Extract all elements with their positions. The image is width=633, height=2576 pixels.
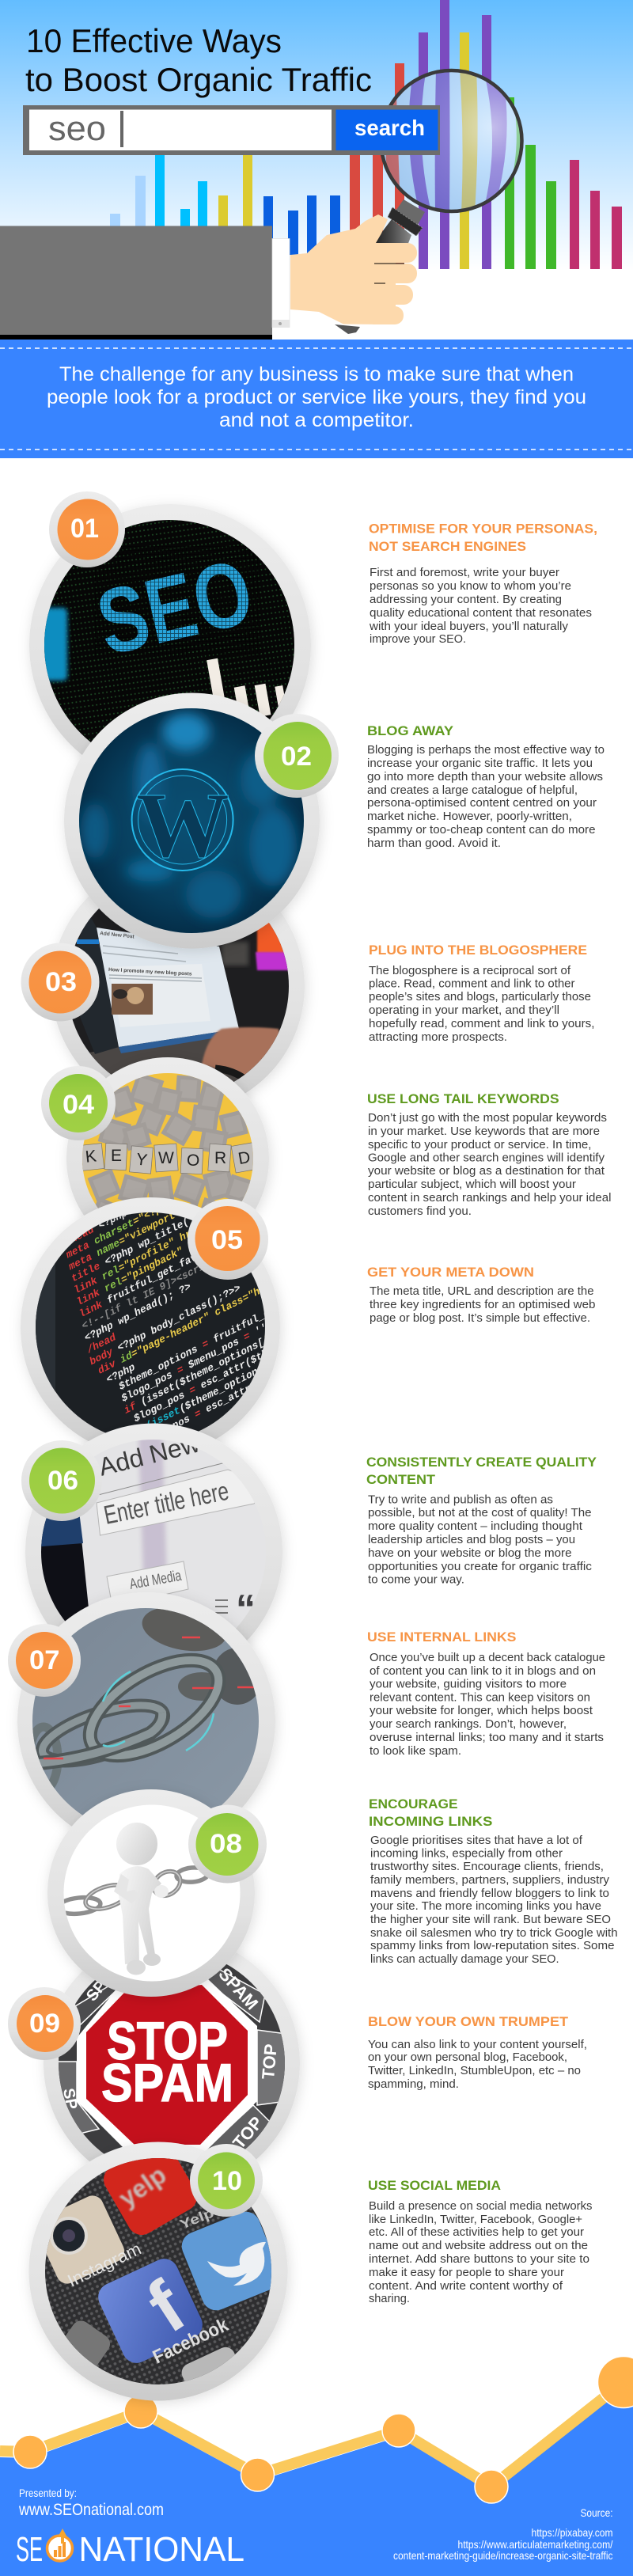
badge 07: 07 — [29, 1645, 60, 1675]
circle 04: keyword tiles: R — [214, 1149, 226, 1167]
circle 05: source code screen: head <?php bloginfo( 'charset' ); ?> — [70, 1134, 272, 1246]
circle 05: source code screen: /head — [86, 1331, 116, 1356]
circle 09: stop spam sign: STOP — [107, 2011, 228, 2071]
circle 05: source code screen: if lt IE 8 ]> <html class="no-js"> ]> — [83, 1085, 291, 1200]
circle 06: add new post screen: Add Media — [128, 1568, 183, 1593]
text block 03: place. Read, comment and link to other — [369, 978, 575, 991]
text block 04: in your market. Use keywords that are more — [368, 1125, 600, 1138]
text block 09 — [368, 2014, 587, 2091]
circle 06: add new post screen: “ — [236, 1587, 256, 1631]
text block 01: personas so you know to whom you’re — [370, 580, 571, 593]
circle 06: add new post screen — [21, 1423, 288, 1645]
text block 07: USE INTERNAL LINKS — [367, 1629, 516, 1645]
text block 03: PLUG INTO THE BLOGOSPHERE — [369, 943, 587, 958]
text block 04: Google and other search engines will identify — [368, 1152, 605, 1165]
text block 08: family members, partners, suppliers, industry — [370, 1874, 610, 1887]
badge 02 — [255, 714, 339, 798]
circle 04: keyword tiles: E — [111, 1147, 122, 1165]
text block 07: your website, guiding visitors to more — [370, 1678, 567, 1690]
title — [25, 22, 372, 98]
text block 03: people’s sites and blogs, particularly those — [369, 991, 591, 1003]
presented by — [18, 2487, 164, 2519]
circle 05: source code screen: html <?php language_attributes(); ?> — [71, 1121, 273, 1232]
source list: https://www.articulatemarketing.com/ — [457, 2538, 613, 2551]
badge 03: 03 — [45, 967, 77, 997]
text block 08: links can actually damage your SEO. — [370, 1953, 559, 1966]
text block 02: harm than good. Avoid it. — [367, 837, 501, 850]
text block 10: Build a presence on social media networks — [369, 2200, 592, 2213]
text block 08: Google prioritises sites that have a lot of — [370, 1834, 583, 1847]
text block 05: page or blog post. It’s simple but effective. — [370, 1312, 590, 1325]
circle 10: social media app icons: Yelp — [177, 2205, 216, 2233]
circle 07: steel chain links — [8, 1592, 275, 1850]
text block 03: hopefully read, comment and link to yours, — [369, 1018, 595, 1030]
text block 09: You can also link to your content yourself, — [368, 2039, 587, 2051]
badge 05 — [188, 1199, 268, 1280]
text block 04: particular subject, which will boost your — [368, 1178, 576, 1191]
circle 02: WordPress logo — [64, 693, 339, 948]
circle 05: source code screen: [if IE 8 ]> <html <?php language_attributes(); — [79, 1076, 337, 1215]
circle 05: source code screen: div id="page-header" class="hfeed site"> — [97, 1254, 322, 1377]
circle 05: source code screen: $logo_pos = $menu_pos = ''; — [121, 1318, 273, 1405]
badge 09 — [8, 1987, 81, 2060]
text block 01: First and foremost, write your buyer — [370, 567, 559, 579]
text block 04 — [367, 1091, 611, 1218]
text block 09: on your own personal blog, Facebook, — [368, 2051, 567, 2064]
circle 01: SEO screen — [29, 491, 311, 786]
circle 05: source code screen: body <?php body_class();?>> — [89, 1281, 241, 1368]
circle 05: source code screen: <?php — [105, 1360, 136, 1387]
text block 02: market niche. However, poorly-written, — [367, 810, 572, 823]
circle 09: stop spam sign: STOP — [222, 2113, 267, 2161]
text block 02: and creates a large catalogue of helpful, — [367, 784, 578, 797]
text block 07: relevant content. This can keep visitors on — [370, 1692, 590, 1705]
badge 05: 05 — [211, 1225, 243, 1255]
header illustration panel — [0, 0, 633, 340]
text block 03: The blogosphere is a reciprocal sort of — [369, 965, 571, 977]
text block 02: go into more depth than your website allows — [367, 771, 603, 783]
icon: magnifying glass — [335, 70, 524, 334]
text block 02 — [367, 723, 605, 850]
text block 06: CONTENT — [366, 1472, 436, 1487]
text block 06: leadership articles and blog posts – you — [368, 1534, 575, 1546]
bar chart — [110, 0, 622, 269]
circle 09: stop spam sign: SP — [83, 1978, 110, 2005]
text block 08 — [369, 1796, 618, 1966]
badge 08: 08 — [210, 1829, 242, 1859]
badge 10 — [190, 2144, 263, 2217]
text block 04: your website or blog as a destination for that — [368, 1165, 605, 1178]
circle 02: WordPress logo: W — [136, 773, 229, 877]
source list: https://pixabay.com — [532, 2526, 612, 2539]
text block 02: spammy or too-cheap content can do more — [367, 824, 595, 837]
badge 01 — [49, 491, 125, 567]
text block 08: your site. The more incoming links you have — [370, 1900, 601, 1913]
text block 06: to come your way. — [368, 1573, 464, 1586]
text block 07: Once you’ve built up a decent back catalogue — [370, 1652, 605, 1664]
text block 10: etc. All of these activities help to get your — [369, 2226, 584, 2239]
text block 07: your website for longer, which helps boost — [370, 1705, 593, 1717]
footer panel: rising line chart — [0, 2357, 633, 2576]
circle 05: source code screen: <?php wp_head(); ?> — [84, 1280, 191, 1345]
circle 04: keyword tiles: O — [187, 1151, 199, 1170]
badge 01: 01 — [70, 514, 99, 544]
text block 01: quality educational content that resonates — [370, 607, 592, 620]
circle 05: source code screen: link rel="pingback" href="<?php bloginfo( ' — [76, 1178, 317, 1309]
text block 06: have on your website or blog the more — [368, 1547, 571, 1560]
badge 10: 10 — [212, 2166, 242, 2196]
text block 06: more quality content – including thought — [368, 1520, 582, 1533]
badge 03 — [21, 943, 100, 1021]
text block 02: Blogging is perhaps the most effective way to — [367, 744, 605, 757]
text block 10: name out and website address out on the — [369, 2240, 588, 2252]
text block 01 — [369, 521, 597, 646]
circle 04: keyword tiles: D — [237, 1148, 252, 1168]
presented by: www.SEOnational.com — [18, 2501, 164, 2519]
logo: SEO National — [16, 2529, 244, 2569]
logo: SEO National: NATIONAL — [79, 2530, 244, 2569]
circle 05: source code screen — [18, 1196, 286, 1444]
text block 05: three key ingredients for an optimised web — [370, 1299, 595, 1311]
text block 04: specific to your product or service. In time, — [368, 1139, 592, 1151]
title: to Boost Organic Traffic — [25, 61, 372, 98]
text block 10: internet. Add share buttons to your site to — [369, 2253, 589, 2266]
circle 01: SEO screen: SEO — [88, 540, 262, 674]
circle 09: stop spam sign: SPAM — [101, 2053, 233, 2113]
search bar — [23, 105, 440, 155]
badge 02: 02 — [281, 742, 312, 772]
panel: intro banner: The challenge for any business is to make sure that when — [59, 363, 574, 385]
circle 06: add new post screen: Add New Post — [96, 1415, 259, 1481]
search bar: seo — [48, 109, 106, 148]
text block 09: Twitter, LinkedIn, StumbleUpon, etc – no — [368, 2065, 581, 2077]
text block 04: USE LONG TAIL KEYWORDS — [367, 1091, 559, 1106]
text block 01: improve your SEO. — [370, 633, 466, 646]
text block 10: like LinkedIn, Twitter, Facebook, Google+ — [369, 2214, 582, 2226]
circle 06: add new post screen: Enter title here — [101, 1476, 231, 1530]
text block 08: mavens and friendly fellow bloggers to link to — [370, 1887, 609, 1900]
text block 04: Don’t just go with the most popular keywords — [368, 1112, 607, 1125]
circle 04: keyword tiles: K — [85, 1147, 97, 1167]
badge 09: 09 — [29, 2009, 60, 2039]
text block 10: content. And write content worthy of — [369, 2280, 563, 2293]
text block 10: USE SOCIAL MEDIA — [368, 2178, 501, 2193]
circle 10: social media app icons: Instagram — [64, 2239, 144, 2291]
circle 05: source code screen: $logo_pos = esc_attr($theme_options['logo_pos — [133, 1288, 385, 1425]
circle 05: source code screen: meta name="viewport" content="width=device — [68, 1145, 304, 1273]
circle 05: source code screen: title <?php wp_title( '|', true, 'right' ); — [70, 1154, 312, 1285]
text block 08: snake oil salesmen who try to trick Google with — [370, 1927, 618, 1940]
text block 10: make it easy for people to share your — [369, 2267, 564, 2279]
text block 05: GET YOUR META DOWN — [367, 1265, 534, 1280]
text block 05: The meta title, URL and description are the — [370, 1285, 593, 1298]
text block 06: opportunities you create for organic traffic — [368, 1561, 592, 1573]
icon: hand holding magnifier — [290, 214, 417, 324]
circle 09: stop spam sign: SP — [59, 2087, 80, 2111]
badge 04: 04 — [63, 1090, 94, 1120]
text block 05 — [367, 1265, 595, 1325]
badge 08 — [188, 1804, 267, 1884]
circle 05: source code screen: <!--[if lt IE 9]><script src="<?php echo get — [81, 1199, 328, 1333]
text block 10 — [368, 2178, 592, 2305]
title: 10 Effective Ways — [26, 22, 282, 59]
text block 10: sharing. — [369, 2293, 410, 2305]
circle 05: source code screen: if (isset($theme_options['logo_position'])) — [123, 1286, 365, 1417]
text block 03: operating in your market, and they’ll — [369, 1004, 559, 1017]
text block 07: of content you can link to it in blogs and on — [370, 1665, 596, 1678]
text block 01: with your ideal buyers, you’ll naturally — [369, 620, 569, 633]
badge 04 — [41, 1066, 116, 1140]
badge 07 — [8, 1624, 81, 1697]
text block 07: your search rankings. Don’t, however, — [370, 1718, 567, 1731]
text block 08: the higher your site will rank. But beware SEO — [370, 1914, 611, 1926]
circle 10: social media app icons: Facebook — [150, 2314, 232, 2368]
text block 06 — [366, 1455, 597, 1586]
circle 05: source code screen: meta charset="<?php bloginfo( 'ch'); ?>" — [66, 1139, 290, 1261]
text block 09: spamming, mind. — [368, 2078, 459, 2091]
circle 05: source code screen: link rel="profile" href="http://gmpg.org/xfn — [74, 1163, 320, 1297]
text block 07 — [367, 1629, 605, 1758]
text block 06: CONSISTENTLY CREATE QUALITY — [366, 1455, 597, 1470]
logo: SEO National: SE — [16, 2530, 43, 2569]
circle 05: source code screen: $menu_pos = esc_attr($theme_options['menu — [138, 1323, 369, 1449]
circle 10: social media app icons: yelp — [113, 2161, 171, 2213]
circle 05: source code screen: if (isset($theme_options['menu_position'])) — [128, 1310, 370, 1440]
circle 04: keyword tiles: W — [158, 1149, 174, 1167]
circle 10: social media app icons: f — [133, 2265, 199, 2348]
circle 03: laptop blog editor: How I promote my new blog posts — [108, 967, 192, 977]
panel: intro banner: people look for a product or service like yours, they find you — [47, 386, 586, 408]
circle 10: social media app icons — [28, 2136, 288, 2401]
text block 04: customers find you. — [368, 1205, 472, 1218]
text block 01: addressing your content. By creating — [370, 594, 562, 606]
text block 02: increase your organic site traffic. It lets you — [367, 757, 593, 770]
text block 01: OPTIMISE FOR YOUR PERSONAS, — [369, 521, 597, 537]
badge 06: 06 — [47, 1466, 78, 1496]
text block 07: overuse internal links; too many and it starts — [370, 1732, 604, 1744]
text block 02: BLOG AWAY — [367, 723, 454, 738]
circle 03: laptop blog editor — [54, 896, 310, 1098]
text block 06: Try to write and publish as often as — [368, 1494, 553, 1507]
circle 04: keyword tiles — [41, 1057, 275, 1217]
badge 06 — [21, 1440, 102, 1521]
panel: intro banner — [0, 340, 633, 458]
text block 08: incoming links, especially from other — [370, 1847, 563, 1860]
sleeve of a business suit — [0, 226, 290, 340]
text block 01: NOT SEARCH ENGINES — [369, 539, 526, 554]
source list: Source: — [581, 2506, 612, 2519]
circle 09: stop spam sign — [8, 1951, 305, 2165]
circle 03: laptop blog editor: Add New Post — [100, 931, 135, 940]
text block 03 — [369, 943, 595, 1044]
text block 02: persona-optimised content centred on your — [367, 797, 597, 810]
circle 08: figure holding chains — [47, 1789, 267, 1997]
panel: intro banner: and not a competitor. — [219, 409, 414, 431]
text block 08: trustworthy sites. Encourage clients, friends, — [370, 1861, 604, 1873]
text block 09: BLOW YOUR OWN TRUMPET — [368, 2014, 569, 2029]
text block 03: attracting more prospects. — [369, 1031, 507, 1044]
search bar: search — [354, 116, 425, 140]
circle 09: stop spam sign: TOP — [258, 2043, 281, 2080]
circle 05: source code screen: $theme_options = fruitful_get_theme_options(); — [118, 1254, 376, 1393]
text block 08: spammy links from low-reputation sites. Some — [370, 1940, 614, 1952]
circle 05: source code screen: link fruitful_get_favicon(); ?> echo get_te — [78, 1189, 320, 1321]
circle 09: stop spam sign: SPAM — [214, 1964, 262, 2013]
presented by: Presented by: — [19, 2487, 77, 2499]
text block 04: content in search rankings and help your ideal — [368, 1192, 611, 1205]
text block 07: to look like spam. — [370, 1745, 461, 1758]
text block 08: INCOMING LINKS — [369, 1814, 492, 1829]
text block 08: ENCOURAGE — [369, 1796, 457, 1812]
source list — [393, 2506, 613, 2562]
circle 04: keyword tiles: Y — [135, 1150, 148, 1170]
text block 06: possible, but not at the cost of quality! The — [368, 1507, 592, 1519]
